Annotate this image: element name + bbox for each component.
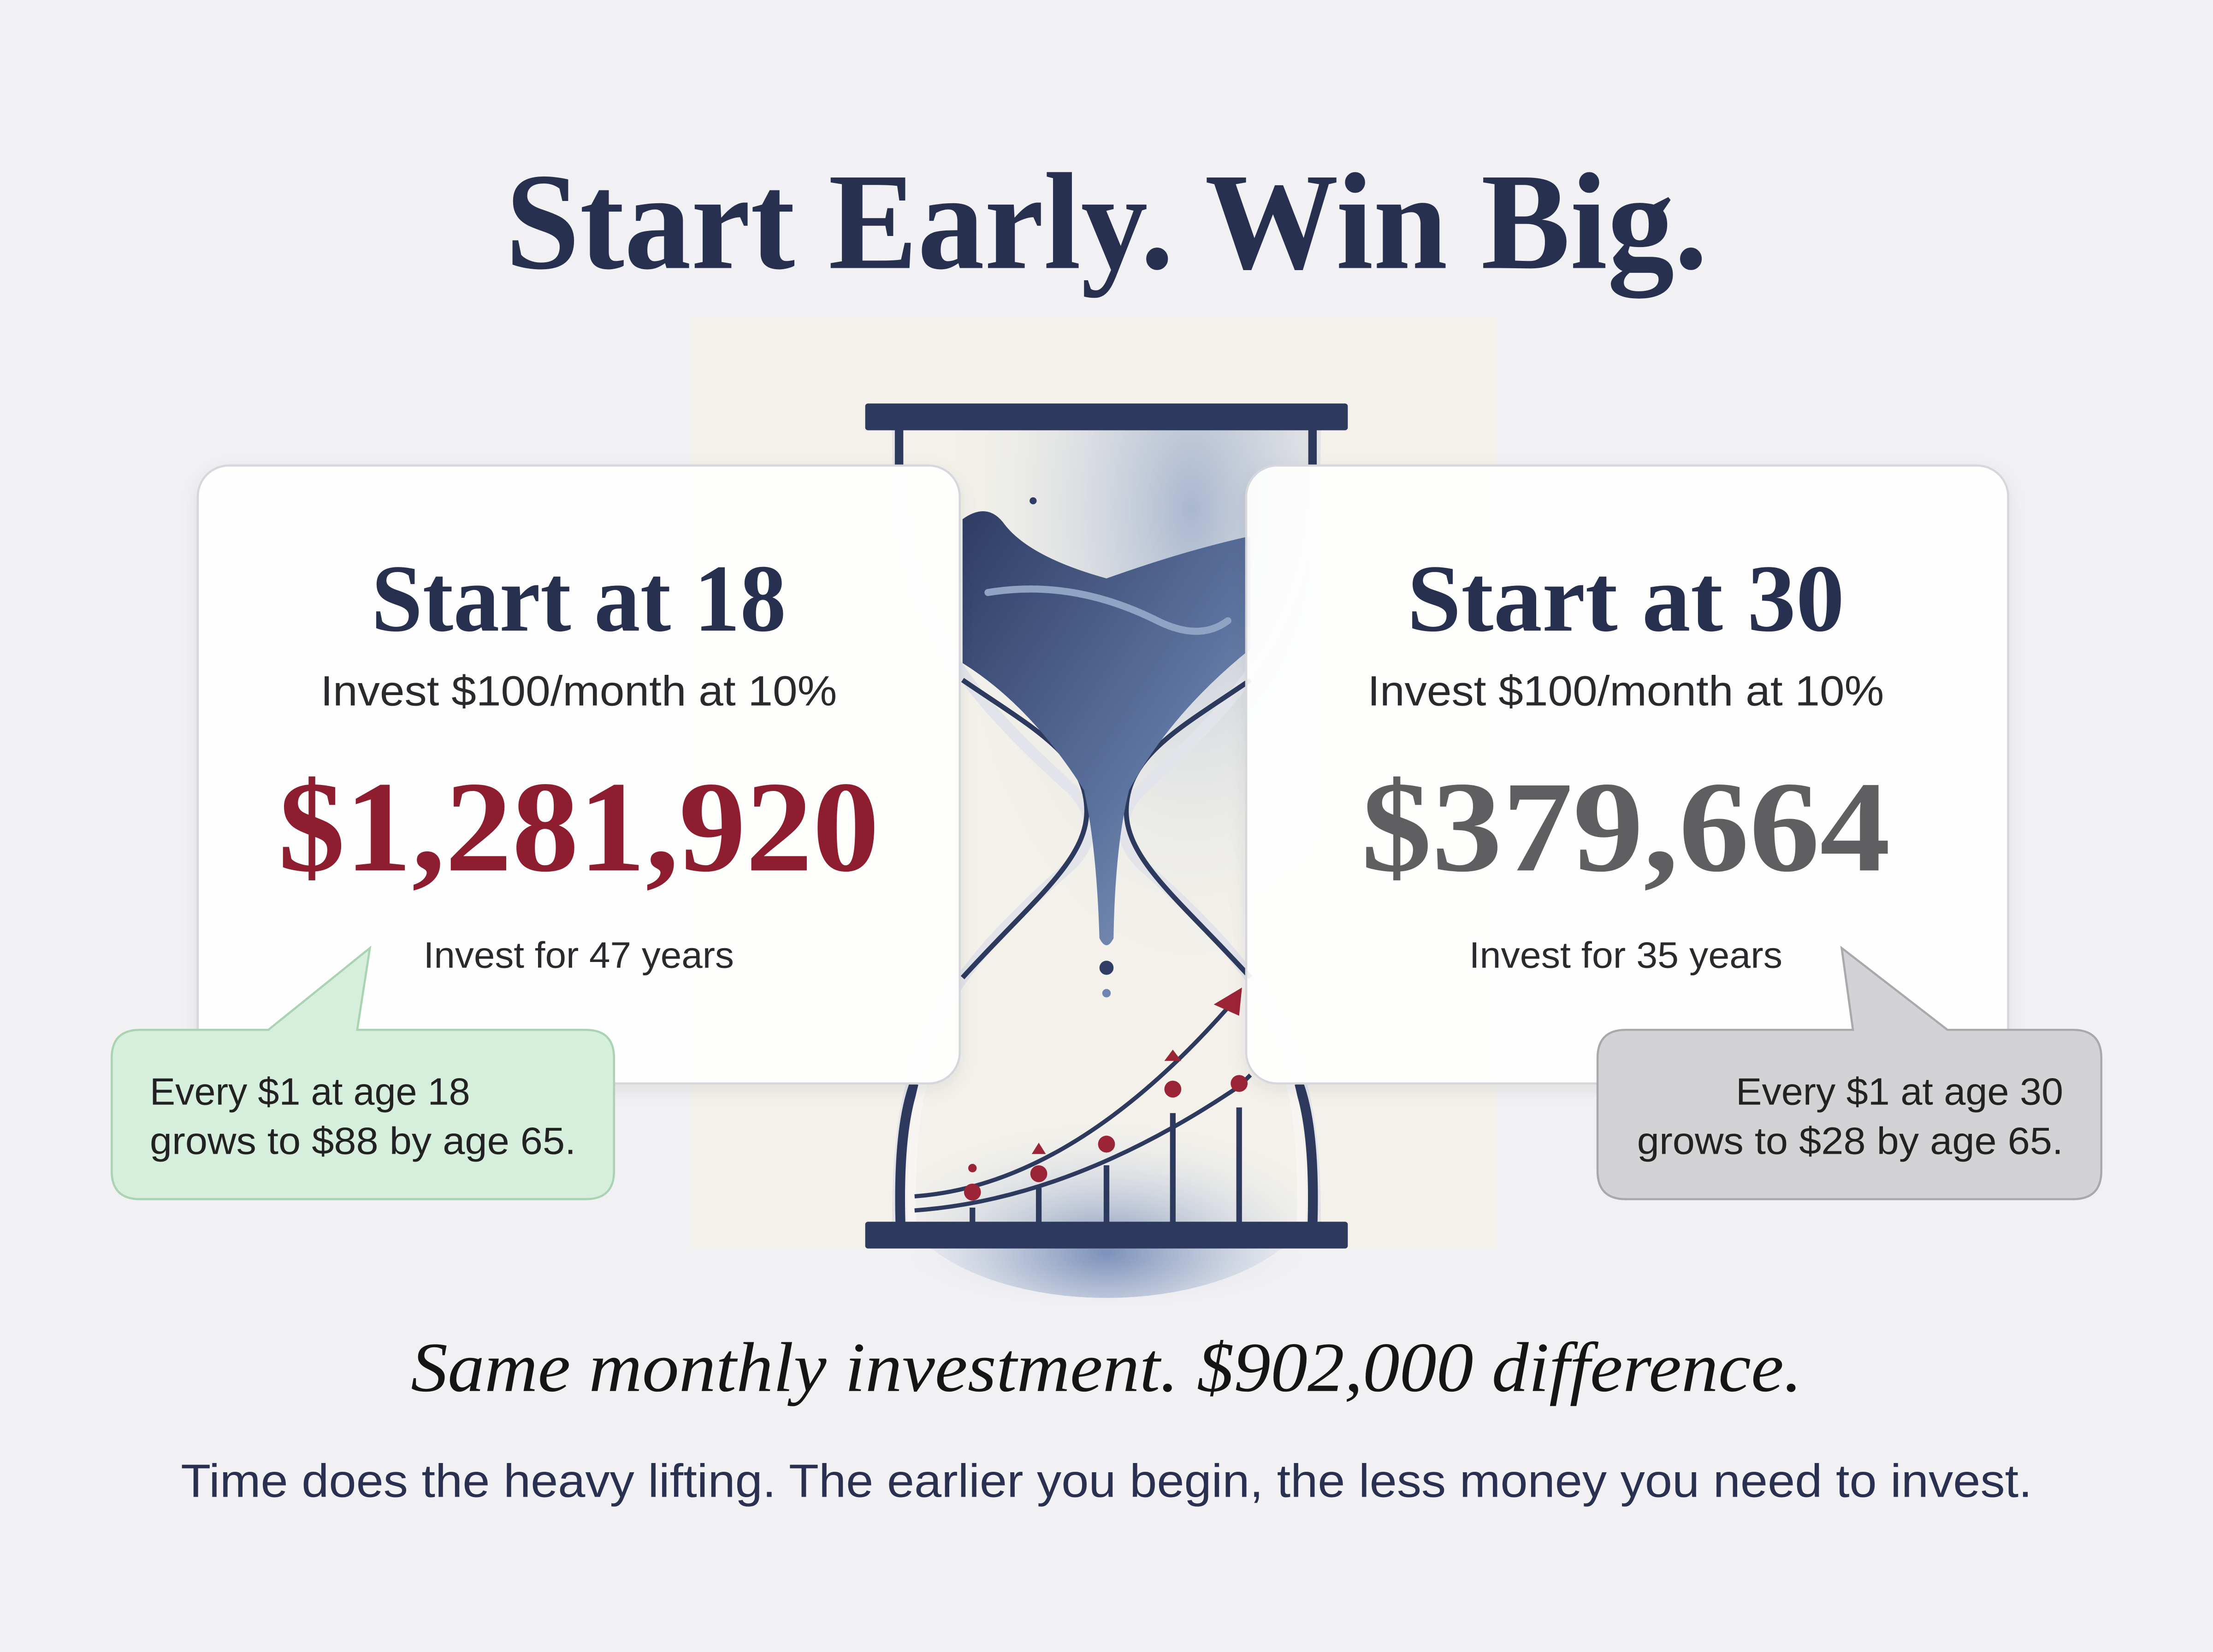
heading: start at 30: Start at 30 — [1407, 546, 1845, 652]
text: 35 years: Invest for 35 years — [1469, 935, 1782, 976]
water — [963, 511, 1250, 945]
value: 1,281,920: $1,281,920 — [278, 755, 879, 898]
panel: start at 18 — [198, 466, 960, 1084]
title: Start Early. Win Big. — [505, 145, 1708, 301]
text: invest 100: Invest $100/month at 10% — [320, 667, 837, 714]
callout: green age 18: grows to $88 by age 65. — [150, 1120, 576, 1162]
inner X lines — [963, 680, 1087, 978]
bottom posts — [900, 1084, 915, 1225]
heading: start at 18: Start at 18 — [371, 546, 786, 652]
glass outline — [898, 430, 1089, 1222]
top and bottom bars — [865, 403, 1348, 430]
callout: green age 18: Every $1 at age 18 — [150, 1070, 470, 1113]
callout: green age 18 — [112, 948, 614, 1199]
text: 47 years: Invest for 47 years — [424, 935, 734, 976]
tagline: Same monthly investment. $902,000 difference. — [411, 1329, 1802, 1407]
panel: start at 30 — [1246, 466, 2008, 1084]
subtitle: Time does the heavy lifting. The earlier you begin, the less money you need to invest. — [181, 1455, 2032, 1507]
text: invest 100 right: Invest $100/month at 10% — [1367, 667, 1884, 714]
callout: gray age 30: Every $1 at age 30 — [1736, 1070, 2063, 1113]
hourglass illustration — [692, 318, 1496, 1333]
growth chart — [915, 987, 1250, 1225]
value: 379,664: $379,664 — [1361, 755, 1890, 898]
callout: gray age 30: grows to $28 by age 65. — [1637, 1120, 2063, 1162]
callout: gray age 30 — [1598, 948, 2101, 1199]
